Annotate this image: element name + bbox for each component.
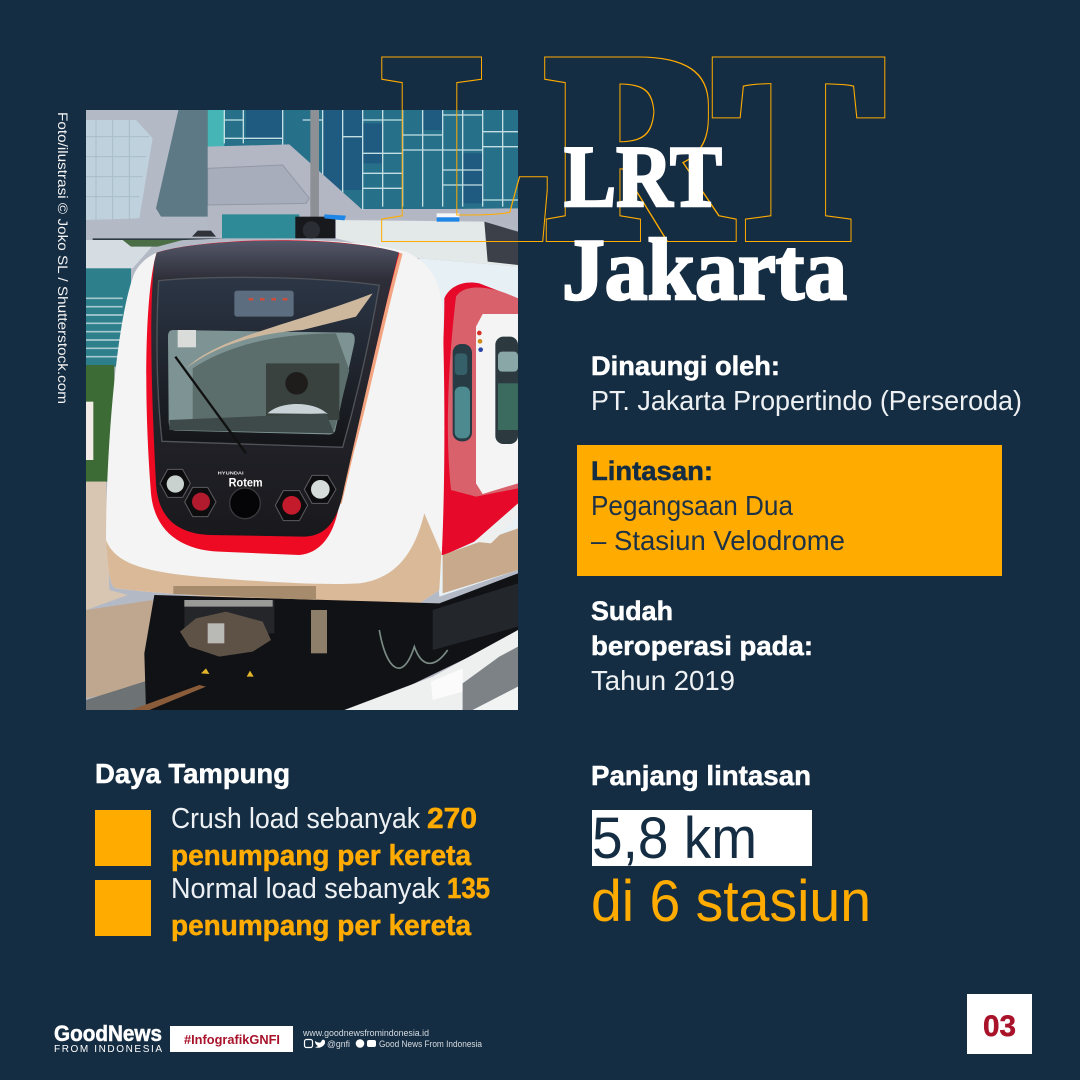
title — [562, 129, 847, 319]
track rail — [344, 630, 518, 710]
page number — [967, 994, 1032, 1054]
lights — [160, 469, 336, 521]
footer logo: GoodNews — [54, 1021, 162, 1046]
footer social links: Good News From Indonesia — [379, 1039, 482, 1049]
outlined background title: LRT — [386, 2, 880, 292]
footer social links: www.goodnewsfromindonesia.id — [302, 1028, 429, 1038]
capacity item: crush load: 270 — [427, 803, 477, 835]
undercarriage — [144, 573, 518, 710]
title: LRT — [564, 129, 722, 226]
capacity item: crush load — [95, 803, 477, 872]
logo on train: HYUNDAI — [218, 471, 244, 477]
info: operator: PT. Jakarta Propertindo (Perseroda) — [591, 385, 1022, 416]
info: operator — [591, 351, 1022, 416]
icon: facebook — [356, 1039, 364, 1048]
icon: twitter — [315, 1040, 325, 1048]
photo credit: Foto/ilustrasi © Joko SL / Shutterstock.com — [55, 112, 70, 404]
footer logo: FROM INDONESIA — [54, 1044, 162, 1055]
hashtag badge: #InfografikGNFI — [184, 1032, 280, 1047]
title: Jakarta — [562, 222, 847, 319]
panel: route: Pegangsaan Dua — [591, 490, 793, 521]
cab window — [168, 330, 355, 435]
stat: stations: di 6 stasiun — [591, 869, 871, 934]
capacity item: normal load: 135 — [447, 873, 490, 905]
info: operating since: Tahun 2019 — [591, 665, 735, 696]
photo background building — [86, 109, 518, 710]
photo: LRT train — [86, 109, 518, 710]
info: operating since: Sudah — [591, 596, 673, 626]
capacity item: normal load: penumpang per kereta — [171, 910, 472, 942]
footer social links — [302, 1028, 482, 1049]
info: operator: Dinaungi oleh: — [591, 351, 780, 381]
info: operating since — [591, 596, 813, 696]
info: operating since: beroperasi pada: — [591, 631, 813, 661]
heading: track length: Panjang lintasan — [591, 760, 811, 791]
train side — [419, 258, 518, 597]
capacity item: normal load — [95, 873, 490, 942]
photo: LRT train: Rotem — [229, 476, 263, 490]
stat: track length: 5,8 km — [592, 806, 757, 871]
icon: instagram — [304, 1040, 312, 1048]
capacity item: crush load: penumpang per kereta — [171, 840, 472, 872]
hashtag badge — [170, 1026, 293, 1052]
panel: route — [577, 445, 1002, 576]
panel: route: Lintasan: — [591, 456, 713, 486]
train front body — [106, 240, 444, 604]
footer social links: @gnfi — [327, 1039, 350, 1049]
red stripe and cab — [146, 240, 401, 555]
heading: capacity: Daya Tampung — [95, 758, 290, 789]
page number: 03 — [983, 1010, 1016, 1043]
icon: youtube — [367, 1040, 376, 1047]
capacity item: crush load: Crush load sebanyak — [171, 803, 420, 835]
panel: route: – Stasiun Velodrome — [591, 525, 845, 556]
capacity item: normal load: Normal load sebanyak — [171, 873, 440, 905]
